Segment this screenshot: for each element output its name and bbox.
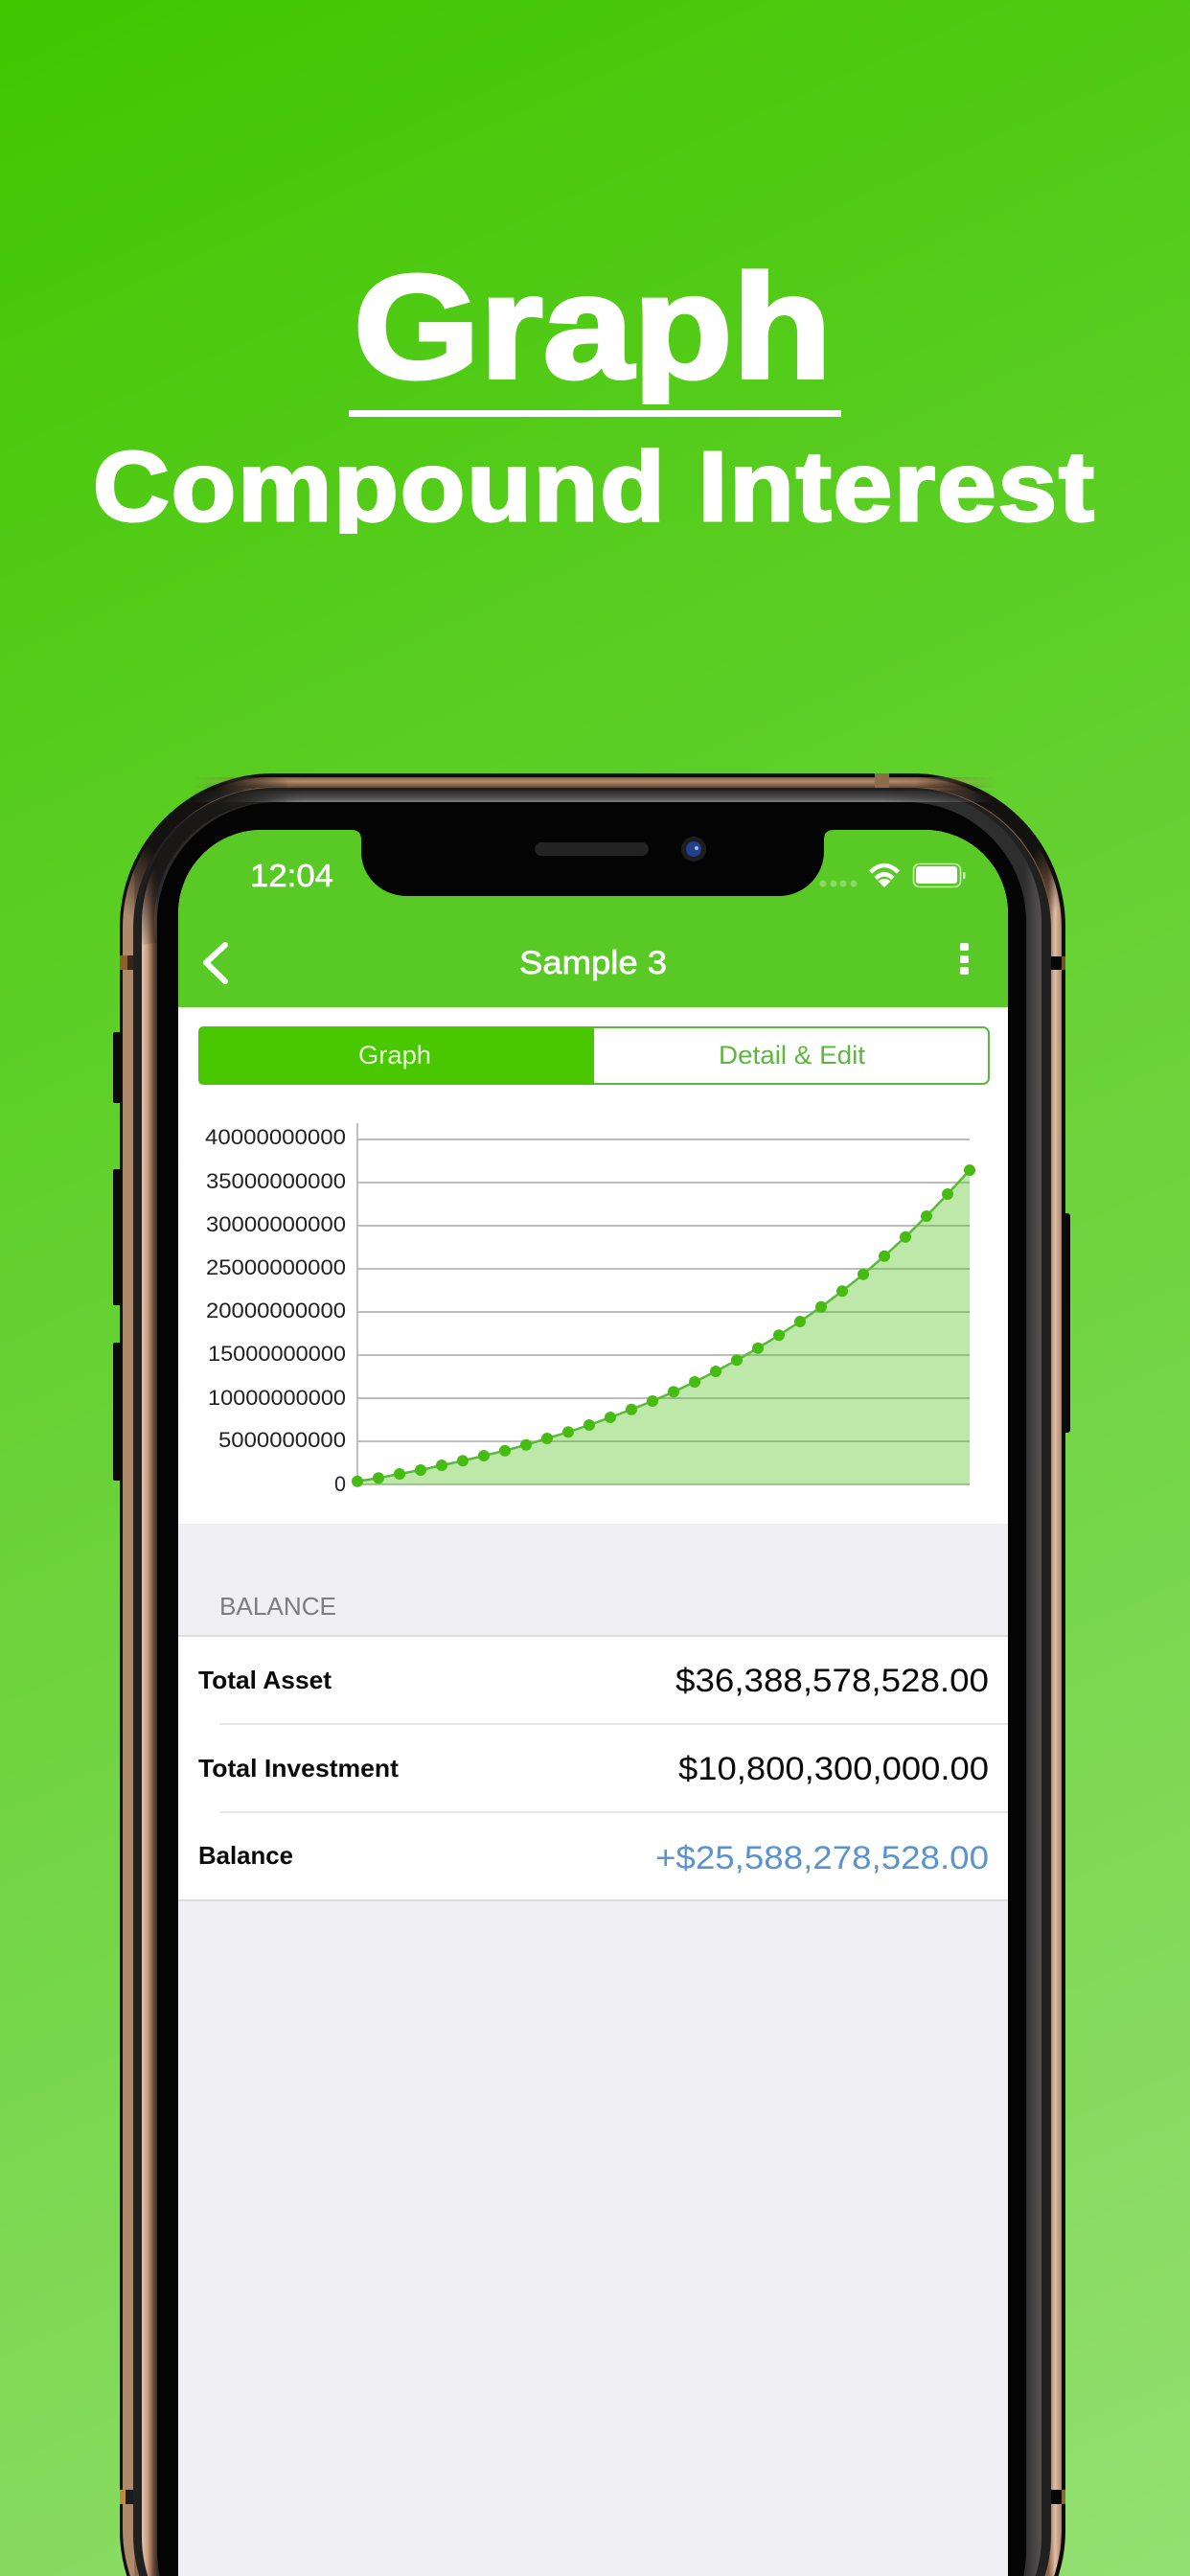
notch: [352, 830, 834, 896]
speaker: [535, 842, 649, 856]
camera: [681, 837, 706, 862]
chart y axis labels: 40000000000: [205, 1125, 346, 1149]
chart y axis labels: 20000000000: [206, 1299, 346, 1322]
chart y axis labels: 25000000000: [206, 1255, 346, 1279]
icon: wifi: [870, 865, 899, 887]
chart y axis labels: 30000000000: [206, 1212, 346, 1236]
row: Balance: [198, 1840, 989, 1876]
phone side buttons: [113, 1032, 1070, 1481]
chart y axis labels: 10000000000: [208, 1386, 346, 1410]
row: Total Asset: $36,388,578,528.00: [675, 1663, 989, 1699]
chart data points: [352, 1164, 975, 1487]
navigation header: [178, 830, 1008, 1007]
chart panel background: [178, 1007, 1008, 1524]
icon: back chevron: [206, 945, 225, 981]
chart line: [357, 1170, 970, 1482]
line chart: [205, 1123, 975, 1496]
row: Total Asset: [198, 1663, 989, 1699]
row: Balance: +$25,588,278,528.00: [655, 1840, 989, 1876]
row: Total Asset: Total Asset: [198, 1666, 332, 1694]
row: Total Investment: [198, 1751, 989, 1787]
chart y axis labels: 5000000000: [218, 1428, 346, 1452]
phone frame bands: [120, 773, 1065, 2576]
row: Total Investment: Total Investment: [198, 1754, 399, 1782]
chart y axis labels: 15000000000: [208, 1342, 346, 1366]
antenna bands: [120, 773, 1065, 2504]
chart gridlines and axis: [357, 1123, 970, 1485]
section heading: BALANCE: BALANCE: [219, 1592, 336, 1621]
signal dots: [820, 880, 857, 887]
screen title: Sample 3: [519, 945, 667, 981]
chart y axis labels: [205, 1125, 346, 1496]
subtitle: Compound Interest: Compound Interest: [93, 431, 1096, 541]
title: Graph: Graph: [354, 244, 832, 409]
segmented control: [198, 1026, 989, 1085]
icon: more menu: [960, 943, 969, 975]
segmented control: Graph: [358, 1041, 431, 1070]
balance table background: [178, 1636, 1008, 1900]
status time: 12:04: [250, 858, 333, 893]
icon: battery: [914, 864, 966, 887]
phone mockup: [113, 773, 1070, 2576]
row: Balance: Balance: [198, 1841, 293, 1870]
row: Total Investment: $10,800,300,000.00: [678, 1751, 989, 1787]
segmented control: Detail & Edit: [719, 1041, 866, 1070]
chart y axis labels: 35000000000: [206, 1169, 346, 1193]
phone screen: [178, 830, 1008, 2576]
chart y axis labels: 0: [334, 1472, 346, 1496]
chart area fill: [357, 1170, 970, 1484]
